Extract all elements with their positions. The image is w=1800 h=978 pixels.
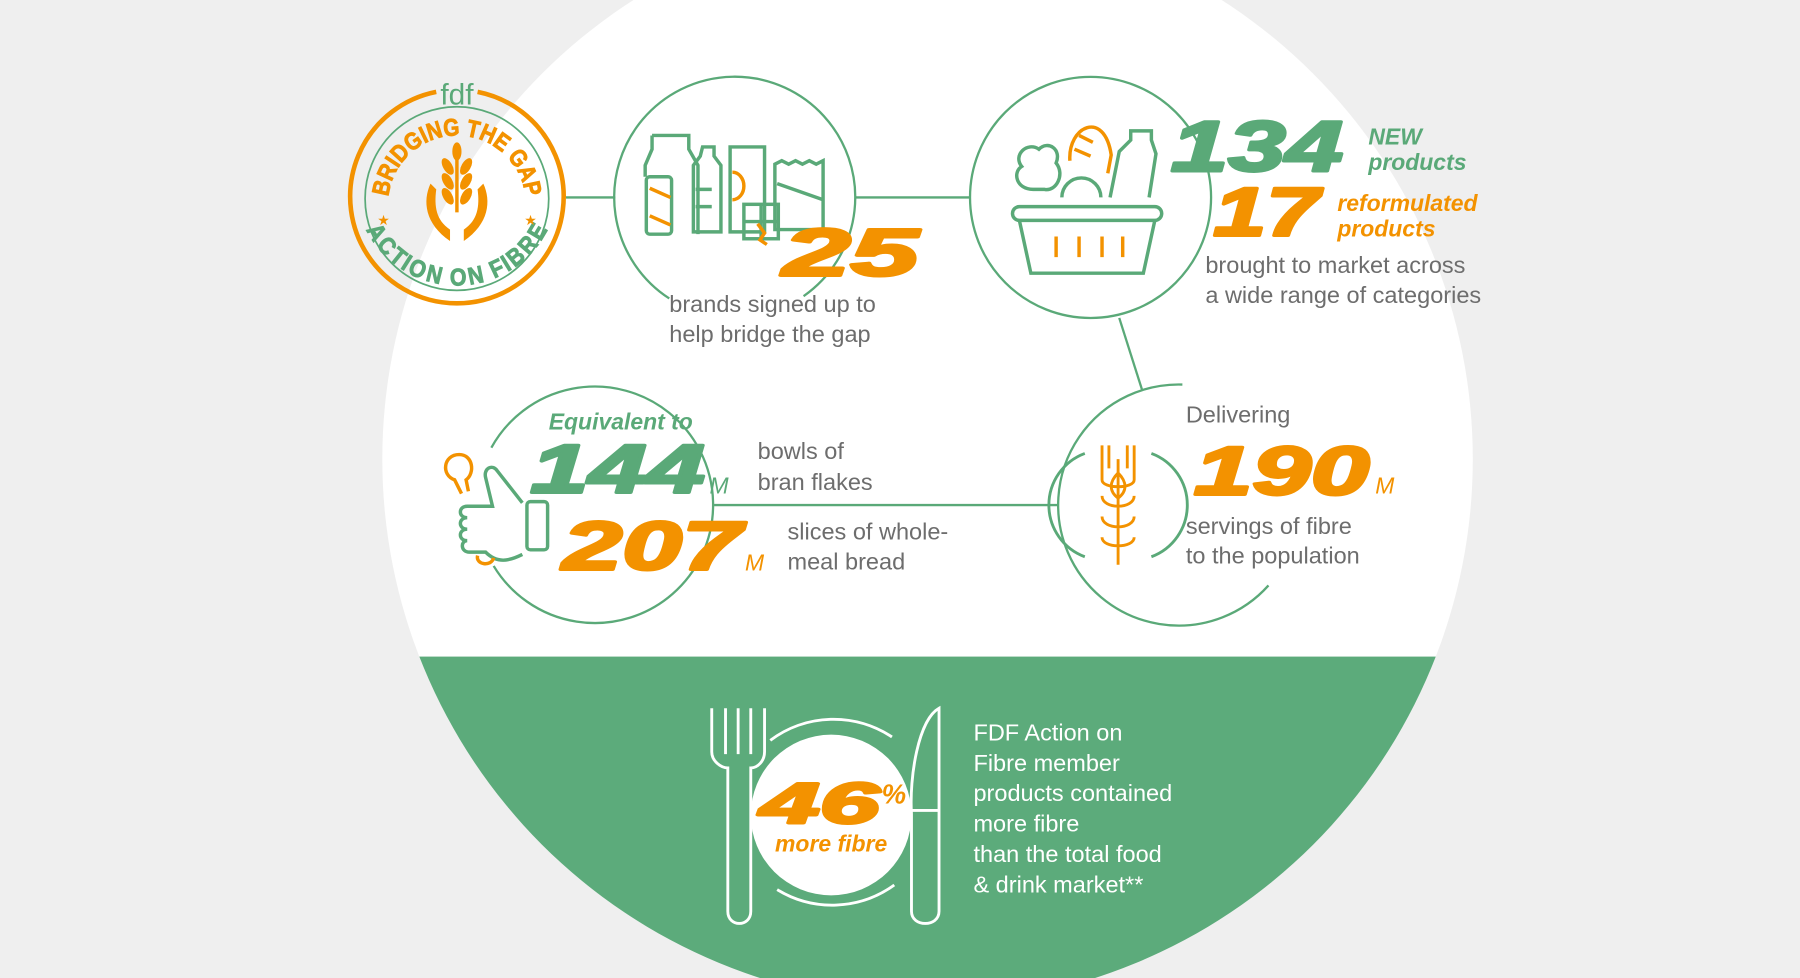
logo: bridging the gap action on fibre: ACTION ON FIBRE — [366, 222, 548, 286]
panel: 46% more fibre: more fibre — [775, 831, 887, 857]
panel: new products: a wide range of categories — [1205, 282, 1481, 308]
icon: wheat in hands — [426, 142, 487, 241]
icon: basket — [1012, 131, 1162, 273]
logo: bridging the gap action on fibre — [348, 78, 566, 306]
panel: equivalents: slices of whole- — [788, 519, 948, 545]
icon: groceries — [645, 135, 823, 239]
stat: 190M: 190 — [1194, 433, 1369, 510]
icon: thumbs up — [446, 455, 548, 564]
panel: new products: NEW — [1368, 124, 1424, 150]
panel: servings — [1049, 384, 1395, 626]
panel: new products: products — [1367, 149, 1466, 175]
stat: 25: 25 — [779, 216, 920, 290]
panel: equivalents — [446, 387, 948, 623]
text: fibre description: products contained — [973, 780, 1172, 806]
logo: bridging the gap action on fibre: fdf — [440, 78, 474, 111]
panel: brands — [614, 77, 920, 347]
panel: equivalents: bran flakes — [758, 469, 873, 495]
panel: brands: help bridge the gap — [669, 321, 871, 347]
stat: 46%: 46 — [758, 772, 881, 836]
connector lines — [566, 197, 1142, 505]
stat: 207M: 207 — [559, 507, 746, 584]
background circle — [344, 0, 1492, 978]
panel: servings: Delivering — [1186, 401, 1290, 427]
panel: servings: servings of fibre — [1186, 513, 1352, 539]
panel: equivalents: meal bread — [788, 548, 905, 574]
panel: brands: brands signed up to — [669, 291, 876, 317]
text: fibre description — [973, 719, 1172, 897]
text: fibre description: Fibre member — [973, 750, 1120, 776]
stat: 134 new: 134 — [1171, 108, 1343, 187]
panel: 46% more fibre: % — [882, 779, 906, 810]
panel: equivalents: M — [745, 549, 765, 575]
stat: 17 reformulated: 17 — [1213, 173, 1323, 250]
icon: wheat circle — [1049, 445, 1187, 565]
panel: equivalents: bowls of — [758, 438, 844, 464]
logo: bridging the gap action on fibre: ★ — [524, 213, 537, 228]
text: fibre description: more fibre — [973, 811, 1079, 837]
panel: new products: brought to market across — [1205, 252, 1465, 278]
panel: new products: reformulated — [1337, 190, 1479, 216]
panel: equivalents: M — [709, 473, 729, 499]
panel: servings: M — [1375, 473, 1395, 499]
panel: new products: products — [1336, 215, 1435, 241]
panel: 46% more fibre — [712, 708, 1172, 923]
logo: bridging the gap action on fibre: BRIDGING THE GAP — [372, 118, 542, 196]
stat: 144M: 144 — [530, 430, 705, 507]
logo: bridging the gap action on fibre: ★ — [377, 213, 390, 228]
panel: servings: to the population — [1186, 543, 1360, 569]
text: fibre description: & drink market** — [973, 871, 1143, 897]
text: fibre description: FDF Action on — [973, 719, 1122, 745]
icon: plate with cutlery — [712, 708, 939, 923]
panel: new products — [970, 77, 1481, 318]
panel: equivalents: Equivalent to — [549, 408, 693, 434]
text: fibre description: than the total food — [973, 841, 1162, 867]
